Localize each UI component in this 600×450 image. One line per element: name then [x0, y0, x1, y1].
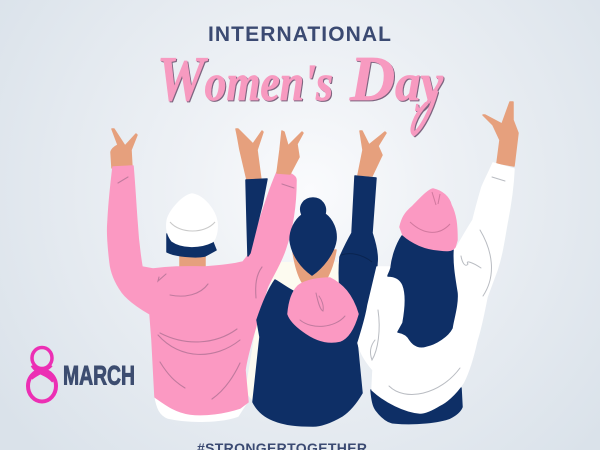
- title: Women's Day: [157, 43, 444, 134]
- hair and bun: [290, 198, 336, 275]
- hand: left peace sign: [111, 129, 137, 168]
- neck: [180, 252, 205, 270]
- text: MARCH: MARCH: [63, 360, 135, 390]
- navy hair: [167, 234, 216, 257]
- figure: right woman in white sweater: [358, 102, 518, 424]
- skin neck: [293, 250, 336, 282]
- sweater folds: [118, 177, 294, 399]
- hand: behind peace sign: [236, 129, 263, 180]
- title: Women's Day: Women's: [157, 43, 333, 114]
- pink sweater: [108, 166, 296, 415]
- figure: left woman in pink sweater: [108, 129, 303, 421]
- navy folds: [341, 254, 372, 262]
- white sweater: [358, 163, 514, 413]
- navy sweater body: [253, 176, 377, 426]
- title: Women's Day: Day: [349, 43, 444, 114]
- cream glow behind figures: [245, 262, 345, 400]
- logo: 8 March: [28, 348, 135, 402]
- title: INTERNATIONAL: INTERNATIONAL: [208, 23, 391, 46]
- hand: raised peace sign right: [277, 131, 303, 174]
- white sweater folds: [371, 177, 505, 394]
- long navy hair: [388, 236, 457, 347]
- navy pants: [371, 388, 462, 424]
- pink beanie: [400, 189, 457, 251]
- hood folds: [300, 293, 345, 326]
- navy left sleeve: [246, 179, 267, 256]
- figure: middle woman in navy sweater: [236, 129, 386, 426]
- icon: ribbon eight: [28, 348, 56, 402]
- white shirt hem: [155, 396, 247, 421]
- pink hood: [288, 278, 358, 342]
- y tail flourish: [412, 92, 436, 134]
- hand: right raised: [483, 102, 518, 166]
- hand: right peace sign: [358, 131, 386, 176]
- white beanie: [167, 194, 217, 246]
